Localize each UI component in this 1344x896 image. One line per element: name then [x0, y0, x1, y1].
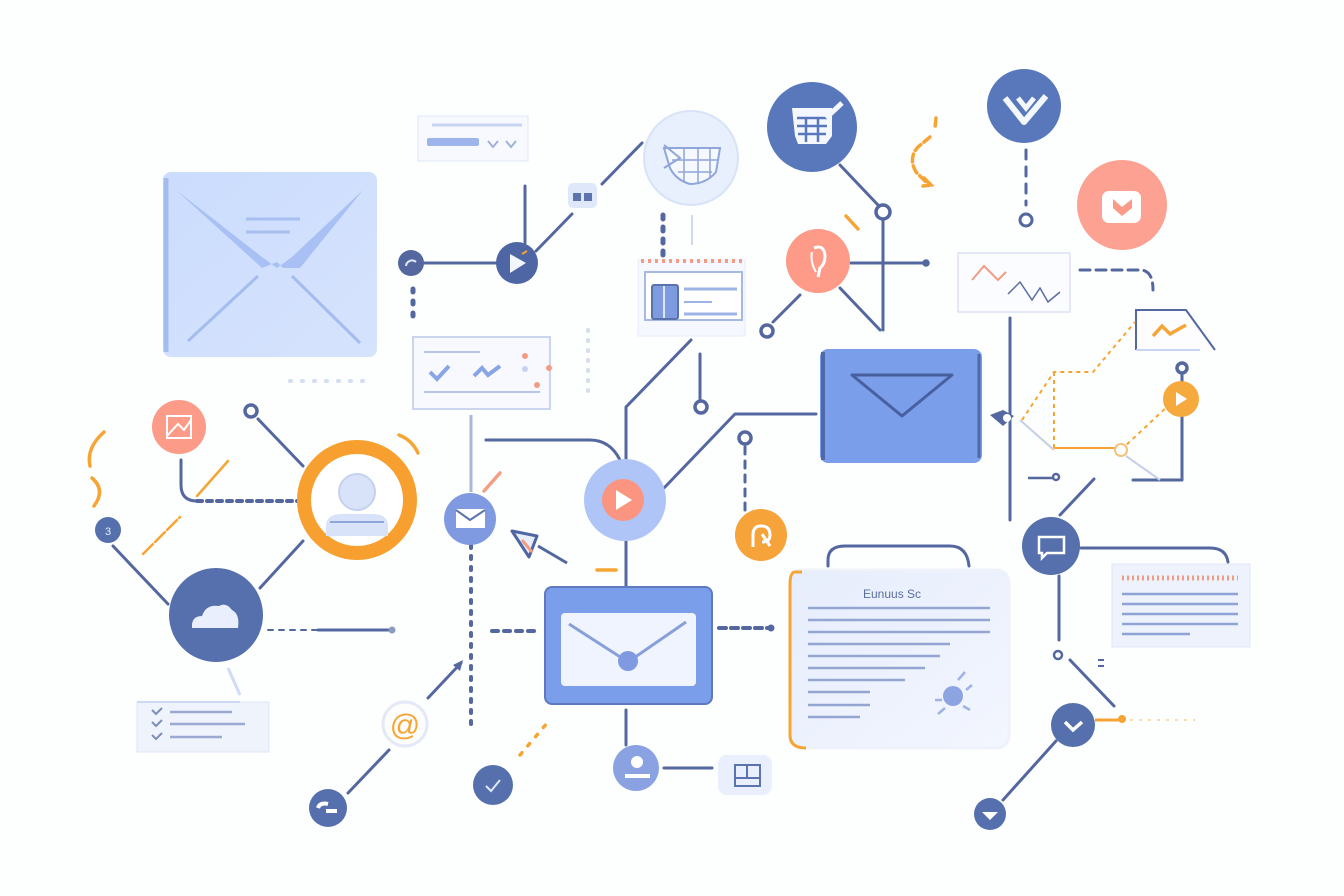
- icon: globe circle: [644, 111, 738, 205]
- icon: mail node: [444, 493, 496, 545]
- icon: calendar circle: [767, 82, 857, 172]
- chart: line chart card: [958, 253, 1070, 312]
- card: screen with list: [638, 260, 745, 336]
- icon: heart node bottom: [974, 798, 1006, 830]
- icon: number badge: [95, 517, 121, 543]
- icon: check small: [473, 765, 513, 805]
- ring nodes: [245, 205, 1187, 444]
- panel: document: [790, 570, 1009, 748]
- panel: large pale envelope: [163, 172, 377, 357]
- small marks right: [1028, 474, 1104, 666]
- icon: book card: [718, 755, 772, 795]
- card: checks chart: [413, 337, 552, 409]
- icon: user in orange ring: [297, 440, 417, 560]
- icon: node ring top: [1020, 214, 1032, 226]
- chart: small peak card: [1136, 310, 1215, 350]
- icon: check circle: [987, 69, 1061, 143]
- icon: check node: [1051, 703, 1095, 747]
- panel: blue envelope: [820, 349, 982, 463]
- node end dot: [388, 626, 396, 634]
- arrowhead: [453, 660, 463, 671]
- panel: central envelope: [545, 587, 712, 704]
- icon: pin orange: [735, 509, 787, 561]
- node: ear icon: [786, 229, 850, 293]
- icon: number badge: 3: [105, 526, 111, 538]
- card: top form: [418, 116, 528, 161]
- icon: small pin: [990, 410, 1014, 426]
- icon: user node: [613, 745, 659, 791]
- icon: small gauge node: [398, 250, 424, 276]
- icon: at sign: [383, 702, 427, 746]
- card: checklist: [137, 702, 269, 752]
- icon: play orange: [1163, 381, 1199, 417]
- chart: orange dashed network: [1020, 322, 1170, 480]
- line: pale connector: [228, 215, 692, 695]
- panel: document: Eunuus Sc: [863, 587, 921, 601]
- line: orange fade: [1095, 716, 1195, 722]
- icon: heart circle: [1077, 160, 1167, 250]
- dotted column: [290, 330, 588, 395]
- icon: at sign: @: [390, 709, 420, 742]
- icon: chat node: [1022, 517, 1080, 575]
- icon: small badge: [568, 183, 597, 208]
- icon: link node: [309, 789, 347, 827]
- decorative orange arcs: [89, 118, 936, 755]
- icon: cloud circle: [169, 568, 263, 662]
- icon: play video circle: [584, 459, 666, 541]
- card: report: [1112, 564, 1250, 647]
- connector lines: [113, 143, 1228, 800]
- icon: play node: [496, 242, 538, 284]
- icon: photo badge: [152, 400, 206, 454]
- icon: cursor arrow: [512, 531, 567, 563]
- small dots: [768, 624, 774, 632]
